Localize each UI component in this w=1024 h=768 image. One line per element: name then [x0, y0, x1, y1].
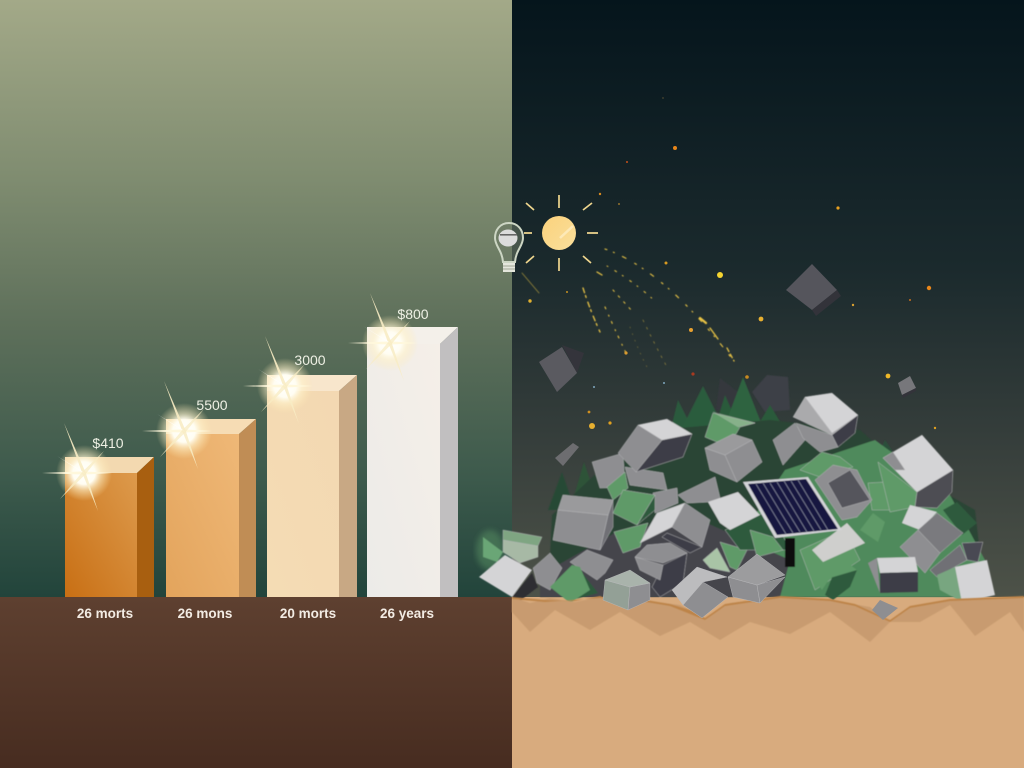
bar 3	[267, 375, 357, 597]
cube: green lower	[810, 557, 857, 600]
floating cube: upper right	[786, 264, 841, 316]
cube: top right	[793, 393, 858, 452]
axis labels: 26 morts	[77, 606, 133, 621]
cube: half buried front white	[672, 567, 728, 618]
cube: white box dark front	[868, 557, 918, 593]
bar 4	[367, 327, 458, 597]
panel: right sand	[512, 597, 1024, 768]
floating cube: upper left	[539, 345, 584, 392]
light rays of particles	[522, 249, 734, 367]
axis labels	[77, 606, 434, 621]
cube: upper middle	[705, 434, 762, 482]
axis labels: 20 morts	[280, 606, 336, 621]
pile backdrop and trees	[476, 375, 985, 597]
sparkle: bar 4	[348, 293, 418, 381]
sand edge and shadows	[512, 596, 1024, 642]
scattered sparks	[528, 97, 936, 429]
cube: small green right	[860, 502, 977, 542]
solar panel	[743, 477, 842, 567]
panel: left soil	[0, 597, 512, 768]
cube: top left large	[618, 419, 692, 472]
panel: left background	[0, 0, 512, 597]
value labels	[92, 306, 429, 451]
cube: white and green right edge	[937, 560, 995, 603]
cube: large white right	[878, 435, 953, 512]
floating cube: small left	[555, 443, 579, 466]
cube: white tilted	[708, 492, 760, 530]
cube: dark grey centre right	[815, 465, 872, 520]
sparkle: bar 3	[243, 336, 313, 424]
value labels: $800	[397, 306, 429, 322]
axis labels: 26 mons	[178, 606, 232, 621]
cube: half buried front centre	[603, 570, 650, 610]
rear cubes	[592, 412, 890, 590]
panel: right background	[512, 0, 1024, 597]
floating cube: small right	[898, 376, 916, 398]
icon: light bulb	[495, 223, 523, 272]
cube: green lower left	[550, 565, 598, 603]
cube: big grey box left	[553, 495, 613, 550]
icon: sun	[524, 195, 598, 271]
bar 1	[65, 457, 154, 597]
cube: white front left	[479, 555, 538, 603]
cube: grey right cluster	[900, 513, 983, 577]
cube: translucent green left	[503, 530, 542, 563]
sparkle: bar 1	[42, 423, 112, 511]
cube: mid lower grey	[635, 543, 687, 597]
value labels: 5500	[196, 397, 228, 413]
cube: half buried small grey	[872, 600, 898, 620]
value labels: $410	[92, 435, 124, 451]
cube: half buried right of centre	[728, 554, 785, 603]
debris pile	[476, 375, 995, 603]
bar 2	[166, 419, 256, 597]
cube: lower left grey	[533, 550, 613, 590]
sparkle: bar 2	[142, 381, 212, 469]
cube: white right small	[902, 505, 937, 530]
cube: white under panel	[812, 523, 865, 562]
cube: white and grey centre	[640, 503, 710, 553]
axis labels: 26 years	[380, 606, 434, 621]
bar chart	[65, 327, 458, 597]
value labels: 3000	[294, 352, 326, 368]
cube: green centre	[613, 490, 655, 525]
